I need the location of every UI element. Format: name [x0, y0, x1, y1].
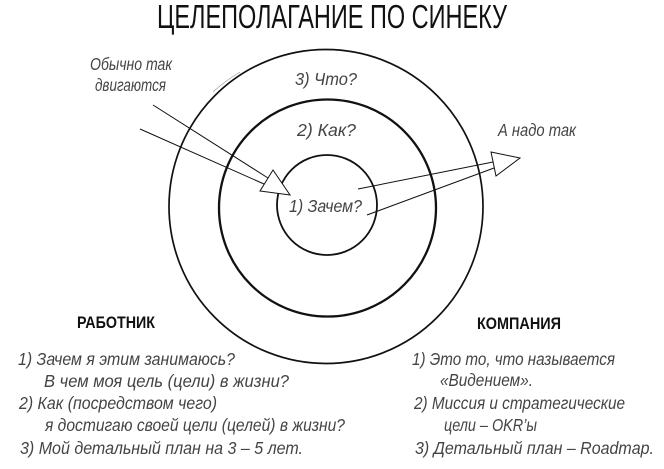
text block: company list: «Видением».	[440, 370, 533, 390]
text block: employee list: 3) Мой детальный план на 3 – 5 лет.	[20, 438, 303, 458]
circle label: how: 2) Как?	[296, 120, 356, 140]
text block: employee list: 2) Как (посредством чего)	[18, 393, 217, 413]
label: usual way: Обычно так	[90, 54, 173, 74]
text block: employee list	[18, 349, 345, 458]
text block: company list	[412, 349, 654, 458]
text block: employee list: я достигаю своей цели (целей) в жизни?	[44, 415, 345, 435]
label: usual way	[90, 54, 173, 95]
text block: company list: 2) Миссия и стратегические	[413, 393, 625, 413]
circle label: what: 3) Что?	[295, 69, 357, 89]
text block: employee list: 1) Зачем я этим занимаюсь?	[18, 349, 235, 369]
circle: inner, why	[277, 155, 377, 255]
sketch stroke on outer circle	[213, 72, 240, 92]
text block: company list: цели – OKR’ы	[444, 415, 537, 435]
arrow: inward, usual way	[140, 105, 290, 195]
heading: company: КОМПАНИЯ	[477, 314, 561, 333]
circle: outer, what	[169, 50, 483, 364]
label: usual way: двигаются	[95, 75, 166, 95]
concentric circles diagram	[169, 50, 483, 364]
arrow: outward, the right way	[358, 152, 520, 215]
text block: company list: 1) Это то, что называется	[412, 349, 615, 369]
text block: employee list: В чем моя цель (цели) в жизни?	[44, 371, 289, 391]
label: the right way: А надо так	[497, 120, 577, 140]
circle: middle, how	[219, 100, 436, 316]
circle label: why: 1) Зачем?	[289, 196, 362, 216]
heading: employee: РАБОТНИК	[77, 313, 156, 332]
